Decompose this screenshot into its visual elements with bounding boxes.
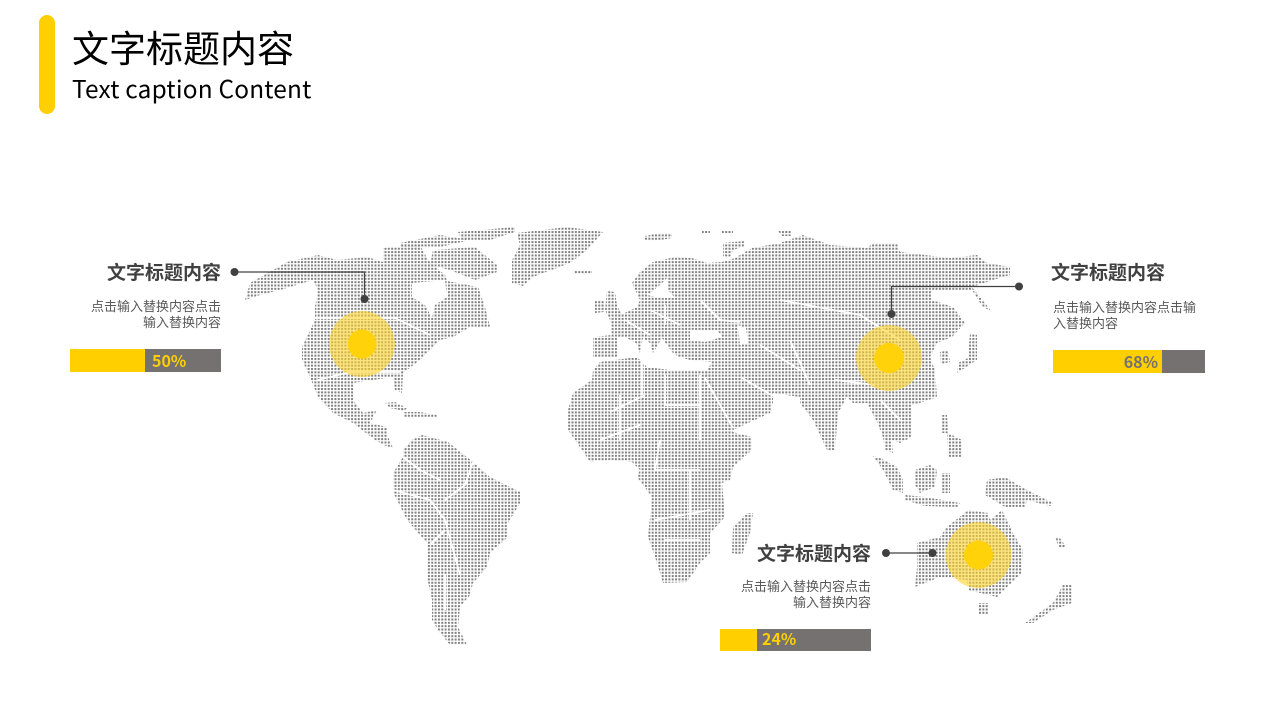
title: 文字标题内容 — [72, 19, 294, 73]
callout: right — [1051, 258, 1205, 373]
progress bar 24%: 24% — [762, 626, 796, 650]
progress bar 24% — [720, 629, 871, 651]
progress bar 50%: 50% — [152, 348, 186, 372]
callout text — [741, 576, 871, 611]
callout: left — [70, 258, 221, 372]
callout text: 点击输入替换内容点击 — [91, 296, 221, 315]
callout heading: 文字标题内容 — [757, 539, 871, 566]
callout text: 点击输入替换内容点击 — [741, 576, 871, 595]
callout heading: 文字标题内容 — [1051, 258, 1165, 285]
leader: East Asia — [888, 282, 1023, 318]
subtitle: Text caption Content — [72, 71, 312, 106]
title accent bar — [39, 15, 55, 114]
callout text: 输入替换内容 — [793, 592, 871, 611]
callout text: 入替换内容 — [1053, 313, 1118, 332]
marker: Australia — [946, 522, 1012, 588]
callout text: 输入替换内容 — [143, 312, 221, 331]
callout: bottom — [720, 539, 871, 651]
progress bar 68%: 68% — [1124, 349, 1158, 373]
leader: North America — [230, 268, 368, 303]
callout heading: 文字标题内容 — [107, 258, 221, 285]
marker: North America — [329, 311, 395, 377]
callout text: 点击输入替换内容点击输 — [1053, 297, 1196, 316]
progress bar 68% — [1053, 350, 1205, 373]
marker: East Asia — [856, 325, 922, 391]
callout text — [91, 296, 221, 331]
leader: Australia — [882, 549, 936, 557]
callout text — [1053, 297, 1196, 332]
progress bar 50% — [70, 349, 221, 372]
